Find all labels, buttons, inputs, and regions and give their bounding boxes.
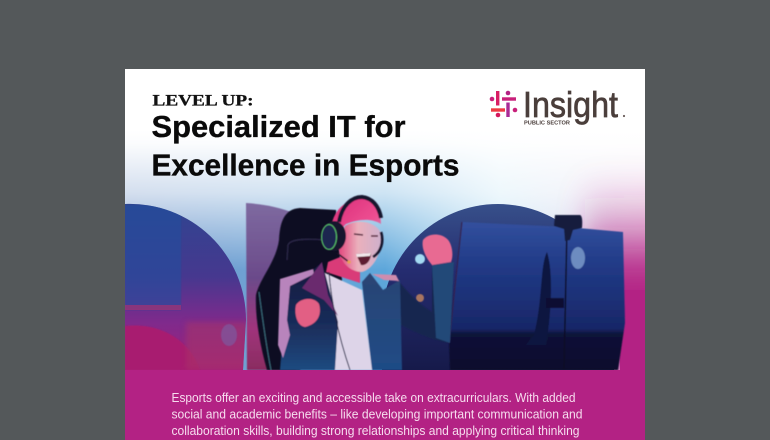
person (278, 197, 454, 370)
intro paragraph: collaboration skills, building strong relationships and applying critical thinking (172, 424, 580, 438)
shoulder stripe (278, 269, 314, 358)
headset (322, 197, 382, 264)
webcam (554, 215, 582, 241)
jacket left side (280, 262, 338, 370)
headset cable (329, 272, 350, 370)
face (339, 222, 381, 272)
subtitle: level up: LEVEL UP: (152, 92, 254, 110)
intro paragraph: social and academic benefits – like developing important communication and (172, 408, 583, 422)
gaming chair (256, 208, 342, 370)
hero image panel (125, 148, 645, 370)
icon: logo mark (490, 91, 517, 117)
middle arc image (246, 203, 296, 370)
eyes (354, 234, 378, 236)
neck (326, 255, 360, 283)
right circular image (382, 204, 614, 370)
logo tagline: PUBLIC SECTOR (524, 120, 570, 126)
title: Excellence in Esports (152, 148, 460, 182)
panel: infographic page (125, 69, 685, 440)
intro paragraph: Esports offer an exciting and accessible take on extracurriculars. With added (172, 391, 576, 405)
logo wordmark: Insight (523, 84, 618, 125)
title (152, 110, 460, 182)
hero background gradient (125, 148, 645, 370)
left circular image (125, 200, 250, 370)
raised arm (400, 274, 440, 340)
raised fist (423, 234, 452, 265)
hair (332, 198, 382, 228)
logo: Insight Public Sector (490, 84, 625, 126)
title: Specialized IT for (152, 110, 406, 144)
intro paragraph (172, 391, 583, 438)
monitor (449, 215, 625, 370)
clenched hand (295, 299, 320, 327)
collar (302, 262, 338, 316)
white shirt (323, 272, 372, 370)
panel: intro text band (125, 370, 645, 440)
jacket right side (362, 273, 402, 370)
mouth (356, 253, 371, 265)
